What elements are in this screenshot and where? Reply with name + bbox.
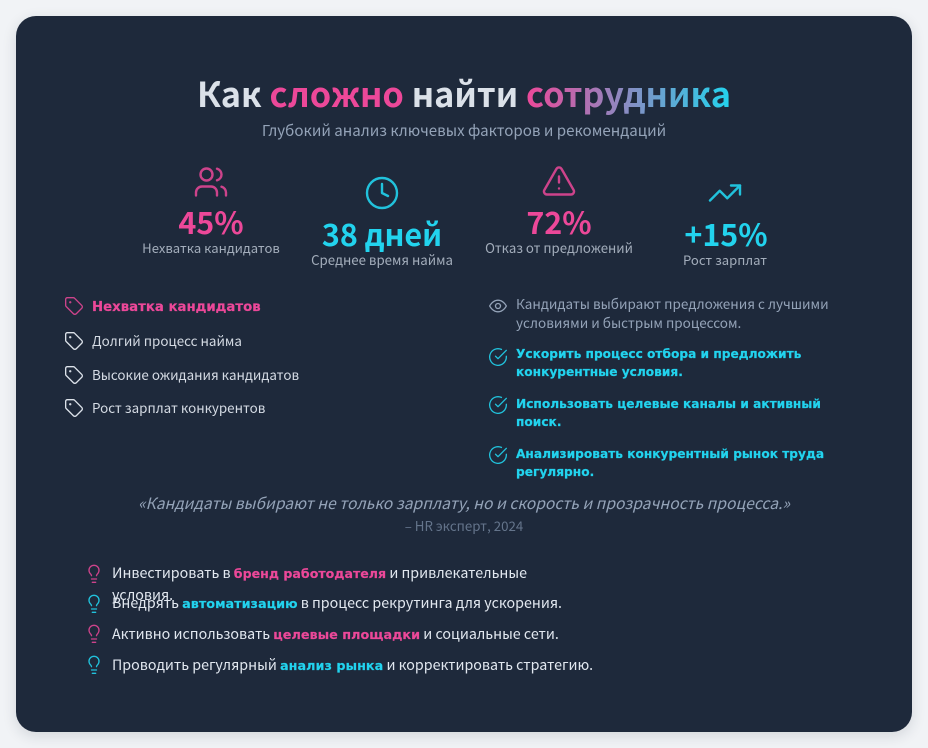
tip: employer brand: Инвестировать в бренд работодателя и привлекательные bbox=[112, 562, 527, 583]
recommendation: speed up bbox=[489, 347, 801, 379]
panel: insight and recommendations bbox=[489, 293, 829, 479]
subtitle: Глубокий анализ ключевых факторов и рекомендаций bbox=[262, 119, 666, 141]
icon: trending up bbox=[708, 184, 742, 202]
recommendation: targeted channels bbox=[489, 396, 821, 429]
stat: candidates shortage bbox=[142, 167, 280, 257]
recommendation: targeted channels: поиск. bbox=[516, 415, 561, 429]
label: Среднее время найма bbox=[311, 250, 453, 269]
value: 72% bbox=[526, 199, 592, 243]
icon: clock bbox=[366, 176, 398, 210]
icon: users bbox=[194, 167, 228, 197]
cause: competitors' salary growth: Рост зарплат конкурентов bbox=[92, 397, 265, 417]
cause: high candidate expectations: Высокие ожидания кандидатов bbox=[92, 364, 299, 384]
panel: causes list bbox=[65, 297, 299, 417]
recommendation: analyse market bbox=[489, 446, 824, 479]
panel: tips bbox=[88, 562, 593, 675]
value: 38 дней bbox=[322, 211, 442, 255]
tip: market analysis: Проводить регулярный анализ рынка и корректировать стратегию. bbox=[112, 654, 593, 675]
insight bbox=[489, 293, 829, 332]
tip: employer brand bbox=[88, 562, 527, 605]
recommendation: speed up: Ускорить процесс отбора и предложить bbox=[516, 347, 801, 361]
value: +15% bbox=[684, 211, 768, 255]
recommendation: analyse market: Анализировать конкурентный рынок труда bbox=[516, 447, 824, 461]
insight: Кандидаты выбирают предложения с лучшими bbox=[516, 293, 829, 313]
tip: targeted platforms: Активно использовать целевые площадки и социальные сети. bbox=[112, 623, 559, 644]
stat: salary growth bbox=[683, 184, 768, 269]
label: Нехватка кандидатов bbox=[142, 238, 280, 257]
recommendation: speed up: конкурентные условия. bbox=[516, 365, 683, 379]
recommendation: analyse market: регулярно. bbox=[516, 465, 594, 479]
title: Как сложно найти сотрудника bbox=[197, 67, 731, 117]
label: Рост зарплат bbox=[683, 250, 767, 269]
stat: offer rejections bbox=[485, 166, 633, 257]
quote attribution: – HR эксперт, 2024 bbox=[405, 516, 523, 535]
icon: warning triangle bbox=[542, 166, 576, 196]
tip: automation: Внедрять автоматизацию в процесс рекрутинга для ускорения. bbox=[112, 592, 562, 613]
tip: employer brand: условия. bbox=[112, 584, 173, 605]
recommendation: targeted channels: Использовать целевые каналы и активный bbox=[516, 397, 821, 411]
cause: long hiring process: Долгий процесс найма bbox=[92, 330, 242, 350]
value: 45% bbox=[178, 199, 244, 243]
quote: «Кандидаты выбирают не только зарплату, но и скорость и прозрачность процесса.» bbox=[138, 491, 790, 514]
label: Отказ от предложений bbox=[485, 238, 633, 257]
insight: условиями и быстрым процессом. bbox=[516, 312, 741, 332]
stat: average time to hire bbox=[311, 176, 453, 269]
cause: shortage of candidates: Нехватка кандидатов bbox=[92, 300, 261, 315]
